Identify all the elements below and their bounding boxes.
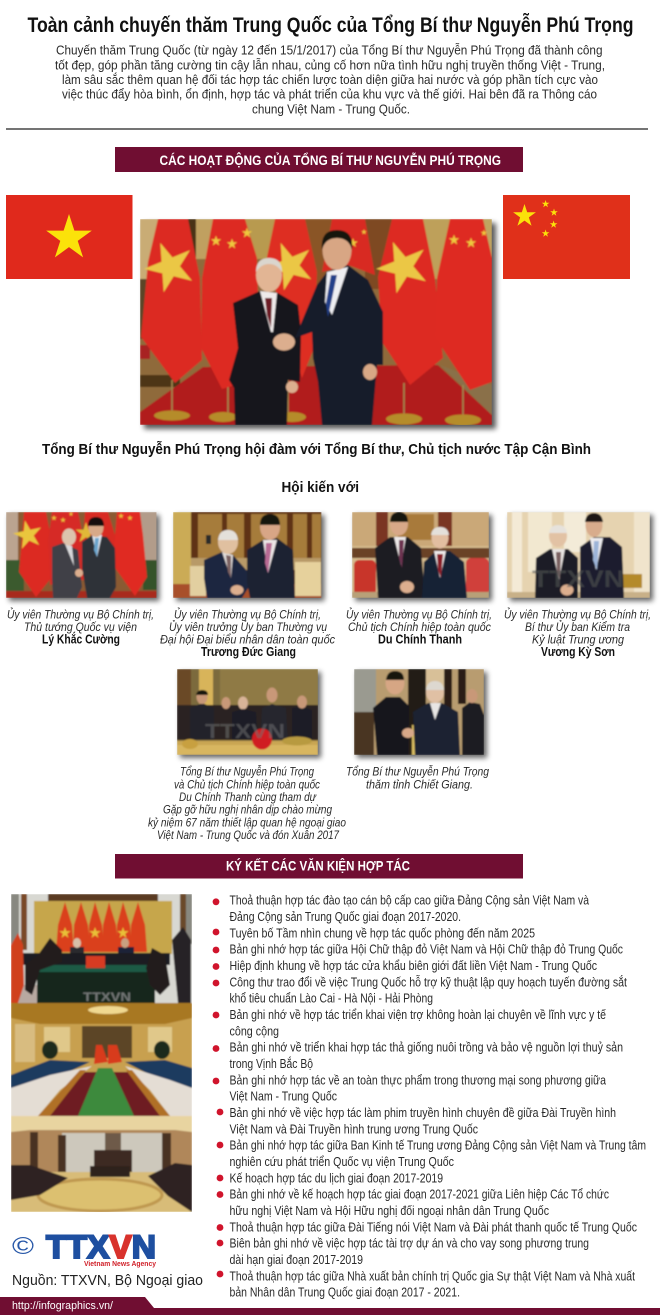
item 1: Thoả thuận hợp tác đào tạo cán bộ cấp cao giữa Đảng Cộng sản Việt Nam và — [230, 894, 589, 908]
item 14: Biên bản ghi nhớ về việc hợp tác tài trợ dự án và cho vay song phương trung — [230, 1237, 589, 1251]
caption: Zhejiang visit: thăm tỉnh Chiết Giang. — [366, 777, 473, 791]
item 5: khổ tiêu chuẩn Lào Cai - Hà Nội - Hải Phòng — [230, 992, 433, 1006]
caption: Vuong Ky Son — [504, 606, 651, 659]
caption: Vuong Ky Son: Kỷ luật Trung ương — [532, 633, 624, 647]
photo: signing ceremony — [11, 894, 192, 1004]
item 9: Việt Nam và Đài Truyền hình trung ương Trung Quốc — [230, 1122, 478, 1136]
intro text block: làm sâu sắc thêm quan hệ đối tác hợp tác chiến lược toàn diện giữa hai nước và góp phần tích cực vào — [62, 72, 598, 87]
item 10 — [217, 1139, 646, 1169]
caption: Ly Khac Cuong: Lý Khắc Cường — [42, 632, 120, 647]
caption: Zhejiang visit — [346, 764, 489, 791]
item 1 — [213, 894, 589, 924]
caption: Du Chinh Thanh: Ủy viên Thường vụ Bộ Chính trị, — [346, 606, 492, 622]
caption: Du Chinh Thanh — [346, 606, 492, 647]
caption: Vuong Ky Son: Vương Kỳ Sơn — [541, 645, 615, 659]
footer bar — [0, 1297, 660, 1315]
item 14: dài hạn giai đoạn 2017-2019 — [230, 1253, 363, 1267]
item 8 — [213, 1073, 606, 1104]
item 2: Tuyên bố Tầm nhìn chung về hợp tác quốc phòng đến năm 2025 — [230, 926, 535, 940]
main photo: handshake in front of flags — [137, 219, 496, 429]
caption: Ly Khac Cuong: Ủy viên Thường vụ Bộ Chính trị, — [7, 606, 154, 622]
caption: Zhejiang visit: Tổng Bí thư Nguyễn Phú Trọng — [346, 764, 489, 779]
photo: Du Chinh Thanh — [352, 512, 492, 601]
photo: reception hall — [11, 1116, 192, 1212]
item 1: Đảng Cộng sản Trung Quốc giai đoạn 2017-2020. — [230, 910, 461, 924]
caption: Truong Duc Giang: Ủy viên trưởng Ủy ban Thường vụ — [169, 619, 327, 634]
photo stack: signing ceremonies — [11, 894, 192, 1212]
caption: Ly Khac Cuong — [7, 606, 154, 647]
intro text block — [55, 42, 605, 116]
caption: Vuong Ky Son: Bí thư Ủy ban Kiểm tra — [525, 619, 630, 634]
item 6: công cộng — [230, 1024, 279, 1038]
caption: Du Chinh Thanh: Chủ tịch Chính hiệp toàn quốc — [348, 620, 491, 634]
caption: friendship gathering: Tổng Bí thư Nguyễn Phú Trọng — [180, 764, 314, 779]
logo: TTXVN: TTXVN — [46, 1229, 156, 1265]
item 15: bản Nhân dân Trung Quốc giai đoạn 2017 - 2021. — [230, 1286, 460, 1300]
intro text block: chung Việt Nam - Trung Quốc. — [252, 102, 410, 116]
caption: main photo: Tổng Bí thư Nguyễn Phú Trọng hội đàm với Tổng Bí thư, Chủ tịch nước Tập Cận Bình — [42, 441, 591, 458]
item 12: hữu nghị Việt Nam và Hội Hữu nghị đối ngoại nhân dân Trung Quốc — [230, 1204, 549, 1218]
photo: friendship gathering: TTXVN — [205, 721, 285, 743]
photo: Ly Khac Cuong — [6, 512, 160, 601]
item 10: nghiên cứu phát triển Quốc vụ viện Trung Quốc — [230, 1155, 454, 1169]
photo: delegation talks — [11, 1003, 192, 1116]
photo: friendship gathering — [177, 669, 321, 758]
caption: Truong Duc Giang: Trương Đức Giang — [201, 645, 296, 659]
caption: Truong Duc Giang: Ủy viên Thường vụ Bộ Chính trị, — [174, 606, 321, 622]
intro text block: Chuyến thăm Trung Quốc (từ ngày 12 đến 15/1/2017) của Tổng Bí thư Nguyễn Phú Trọng đã thành công — [56, 42, 602, 58]
footer bar: http://infographics.vn/ — [12, 1300, 114, 1312]
banner: activities heading: CÁC HOẠT ĐỘNG CỦA TỔNG BÍ THƯ NGUYỄN PHÚ TRỌNG — [160, 151, 501, 168]
caption: Ly Khac Cuong: Thủ tướng Quốc vụ viện — [24, 620, 137, 634]
item 11: Kế hoạch hợp tác du lịch giai đoạn 2017-2019 — [230, 1171, 443, 1185]
source credit: Nguồn: TTXVN, Bộ Ngoại giao — [12, 1272, 203, 1289]
item 5 — [213, 974, 627, 1006]
caption: friendship gathering: và Chủ tịch Chính hiệp toàn quốc — [174, 777, 320, 791]
banner: activities heading — [115, 147, 523, 172]
item 15 — [217, 1269, 635, 1300]
intro text block: tốt đẹp, góp phần tăng cường tin cậy lẫn nhau, củng cố hơn nữa tình hữu nghị truyền thống Việt - Trung, — [55, 58, 605, 72]
icon: Vietnam flag — [6, 195, 132, 279]
icon: China flag — [503, 195, 630, 279]
photo: signing ceremony: TTXVN — [83, 990, 131, 1004]
item 14 — [217, 1237, 589, 1267]
caption: Truong Duc Giang — [160, 606, 335, 659]
photo: Truong Duc Giang — [173, 512, 324, 601]
icon: copyright mark: © — [12, 1233, 34, 1260]
banner: signed documents heading: KÝ KẾT CÁC VĂN KIỆN HỢP TÁC — [226, 857, 410, 874]
caption: Du Chinh Thanh: Du Chính Thanh — [378, 633, 462, 647]
item 9 — [217, 1106, 616, 1136]
logo: TTXVN: Vietnam News Agency — [84, 1259, 157, 1268]
heading: meetings: Hội kiến với — [282, 480, 359, 496]
bullet list: signed documents — [213, 894, 646, 1300]
caption: friendship gathering: Du Chính Thanh cùng tham dự — [179, 790, 317, 804]
photo: Vuong Ky Son — [507, 512, 653, 601]
item 8: Việt Nam - Trung Quốc — [230, 1090, 337, 1104]
photo: Vuong Ky Son: TTXVN — [532, 566, 624, 593]
item 7 — [213, 1041, 623, 1071]
caption: friendship gathering: Gặp gỡ hữu nghị nhân dịp chào mừng — [163, 803, 332, 817]
item 6 — [213, 1008, 606, 1038]
banner: signed documents heading — [115, 854, 523, 878]
caption: friendship gathering: kỷ niệm 67 năm thiết lập quan hệ ngoại giao — [148, 815, 346, 829]
caption: Truong Duc Giang: Đại hội Đại biểu nhân dân toàn quốc — [160, 633, 335, 647]
caption: friendship gathering: Việt Nam - Trung Quốc và đón Xuân 2017 — [157, 828, 340, 842]
item 4: Hiệp định khung về hợp tác cửa khẩu biên giới đất liền Việt Nam - Trung Quốc — [230, 959, 597, 973]
caption: friendship gathering — [148, 764, 346, 842]
item 7: trong Vịnh Bắc Bộ — [230, 1056, 313, 1071]
item 12 — [217, 1188, 609, 1218]
intro text block: việc thúc đẩy hòa bình, ổn định, hợp tác và phát triển của khu vực và thế giới. Hai bên đã ra Thông cáo — [62, 86, 597, 102]
photo: Zhejiang visit — [354, 669, 487, 758]
